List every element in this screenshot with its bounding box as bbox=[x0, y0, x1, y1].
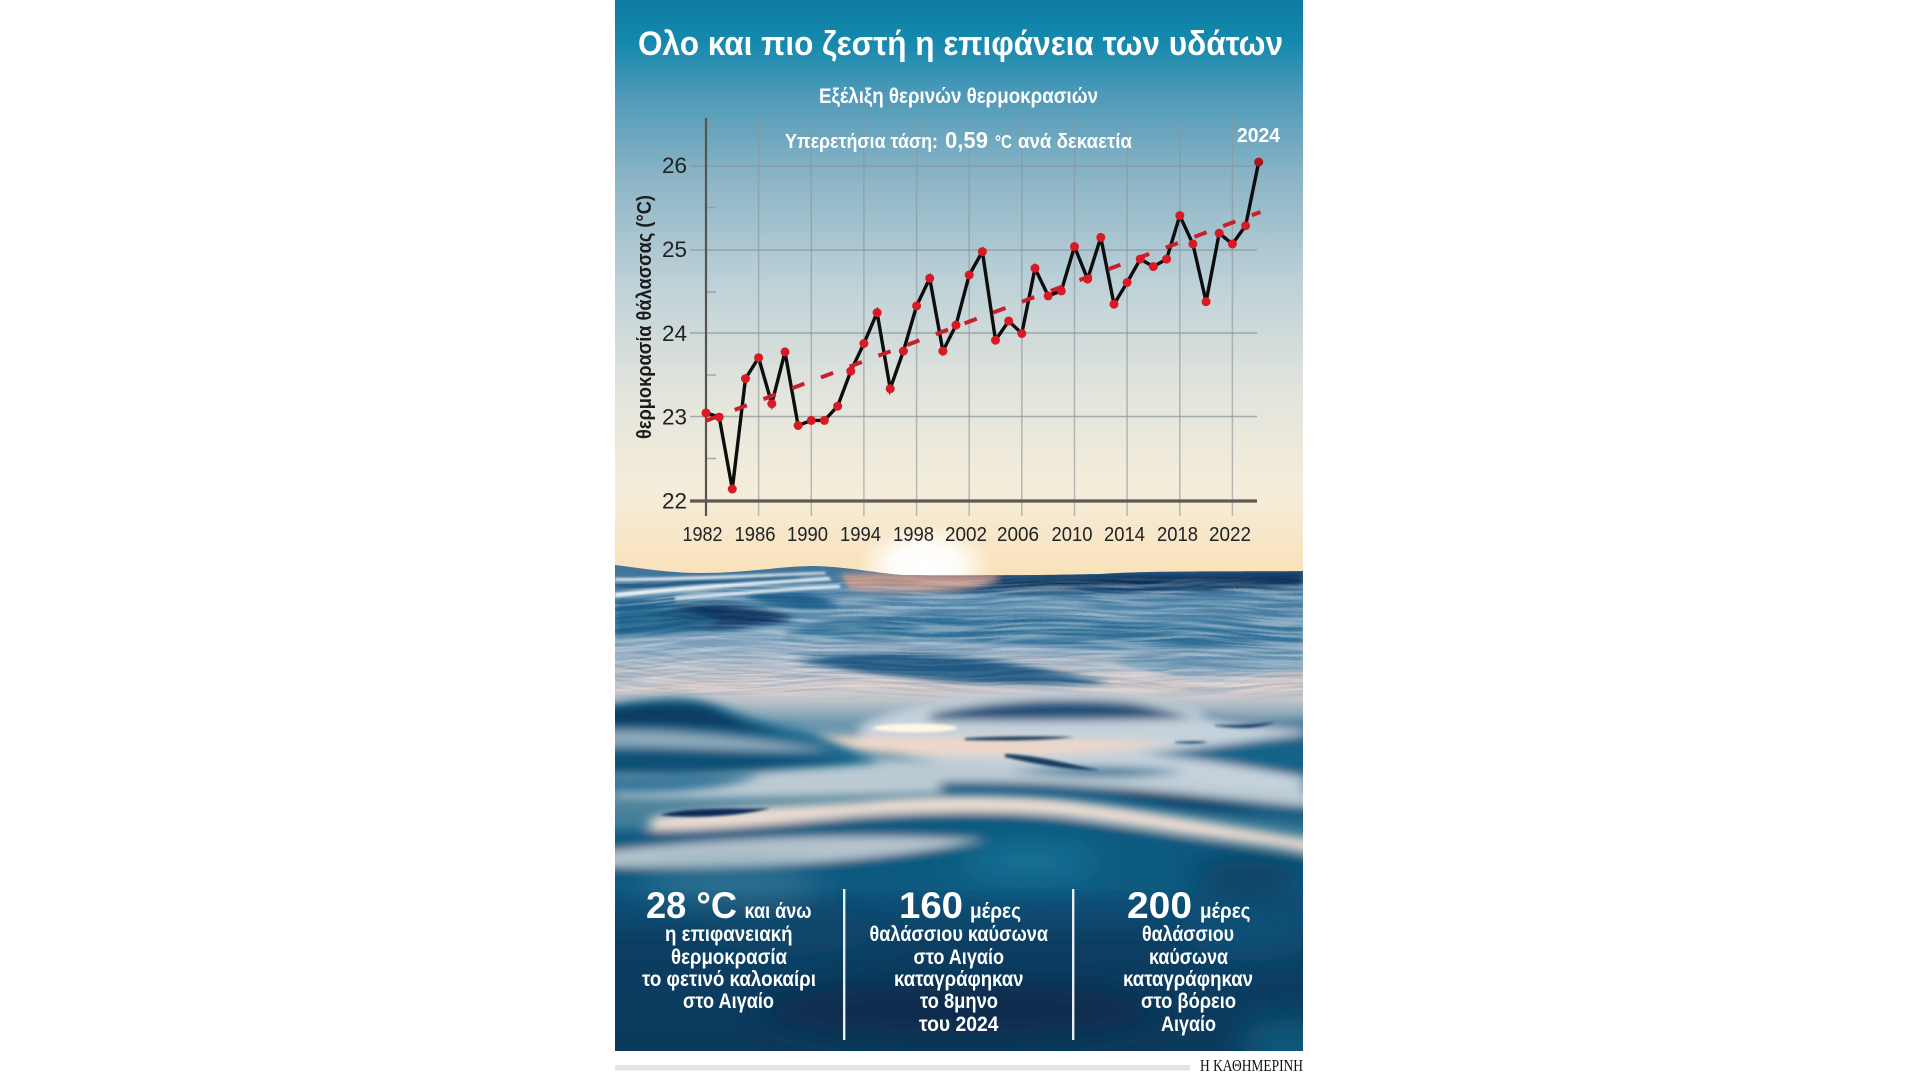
separator 2 bbox=[1072, 889, 1074, 1040]
x axis labels: 1998 bbox=[893, 524, 934, 546]
fact 2: 160 days: καταγράφηκαν bbox=[894, 968, 1024, 991]
temperature line bbox=[706, 162, 1259, 489]
x axis labels: 1982 bbox=[682, 524, 722, 546]
y axis labels: 25 bbox=[662, 237, 687, 262]
separator 1 bbox=[843, 889, 845, 1040]
fact 1: 28 °C: στο Αιγαίο bbox=[683, 990, 774, 1013]
x axis labels: 2006 bbox=[997, 524, 1039, 546]
panel: sea waves bbox=[615, 565, 1303, 1051]
fact 1: 28 °C: 28 °C bbox=[646, 885, 737, 926]
fact 3: 200 days: στο βόρειο bbox=[1141, 990, 1236, 1013]
fact 3: 200 days: 200 bbox=[1127, 885, 1192, 926]
y axis labels: 26 bbox=[662, 153, 687, 178]
fact 1: 28 °C: η επιφανειακή bbox=[665, 923, 792, 946]
x axis labels: 2022 bbox=[1209, 524, 1251, 546]
fact 3: 200 days: μέρες bbox=[1200, 900, 1251, 923]
trend annotation: Υπερετήσια τάση: bbox=[785, 130, 938, 153]
y axis title: θερμοκρασία θάλασσας (°C) bbox=[634, 195, 656, 439]
fact 3: 200 days: θαλάσσιου bbox=[1142, 923, 1234, 946]
fact 1: 28 °C: το φετινό καλοκαίρι bbox=[642, 968, 816, 991]
fact 1: 28 °C: και άνω bbox=[744, 900, 812, 923]
x axis labels bbox=[682, 524, 1251, 546]
y axis labels: 23 bbox=[662, 404, 687, 430]
fact 3: 200 days: καύσωνα bbox=[1149, 946, 1228, 969]
trend annotation: °C bbox=[995, 132, 1012, 152]
footer bar bbox=[615, 1065, 1190, 1070]
left dark wave hill bbox=[600, 697, 1320, 890]
y axis labels: 24 bbox=[662, 321, 687, 346]
x axis labels: 2002 bbox=[945, 524, 987, 546]
fact 1: 28 °C: θερμοκρασία bbox=[671, 946, 787, 969]
bottom dark water glows bbox=[640, 850, 1340, 1071]
fact 3: 200 days: καταγράφηκαν bbox=[1123, 968, 1253, 991]
fact 2: 160 days: στο Αιγαίο bbox=[914, 946, 1004, 969]
sun glow bbox=[862, 528, 988, 576]
line chart: sea temperature 1982-2024 bbox=[634, 118, 1281, 546]
fact 2: 160 days: μέρες bbox=[970, 900, 1021, 923]
x axis labels: 1994 bbox=[840, 524, 881, 546]
fact 2: 160 days bbox=[870, 885, 1048, 1036]
x axis labels: 2018 bbox=[1157, 524, 1198, 546]
ripple texture bbox=[615, 576, 1303, 698]
title: Ολο και πιο ζεστή η επιφάνεια των υδάτων bbox=[638, 25, 1283, 63]
trend annotation: ανά δεκαετία bbox=[1018, 130, 1132, 153]
white wave streaks bbox=[615, 572, 840, 600]
axes bbox=[705, 118, 707, 516]
label: 2024: 2024 bbox=[1237, 125, 1281, 147]
horizontal grid lines bbox=[690, 124, 1257, 458]
vertical grid lines bbox=[759, 118, 1232, 516]
fact 3: 200 days bbox=[1123, 885, 1253, 1036]
x axis labels: 1986 bbox=[734, 524, 776, 546]
fact 2: 160 days: 160 bbox=[899, 885, 963, 926]
x axis labels: 1990 bbox=[787, 524, 828, 546]
dark ripple patches over the texture bbox=[615, 592, 1110, 683]
subtitle: Εξέλιξη θερινών θερμοκρασιών bbox=[819, 85, 1098, 108]
fact 3: 200 days: Αιγαίο bbox=[1161, 1013, 1216, 1036]
lower smooth waves bbox=[615, 693, 1320, 826]
fact 2: 160 days: θαλάσσιου καύσωνα bbox=[870, 923, 1048, 946]
fact 2: 160 days: του 2024 bbox=[919, 1013, 999, 1036]
data points bbox=[702, 158, 1263, 494]
panel: sky background bbox=[615, 0, 1303, 608]
upper ripple zone bbox=[615, 570, 1303, 685]
infographic bbox=[615, 0, 1303, 1071]
trend line bbox=[706, 212, 1260, 421]
dark wave accents and highlights bbox=[660, 722, 1275, 817]
y axis labels bbox=[662, 153, 687, 514]
credit: newspaper name: Η ΚΑΘΗΜΕΡΙΝΗ bbox=[1200, 1056, 1303, 1075]
trend annotation bbox=[785, 127, 1132, 153]
y axis labels: 22 bbox=[662, 488, 687, 514]
x axis labels: 2014 bbox=[1104, 524, 1145, 546]
fact 1: 28 °C bbox=[642, 885, 816, 1013]
x axis labels: 2010 bbox=[1052, 524, 1092, 546]
trend annotation: 0,59 bbox=[945, 127, 988, 153]
fact 2: 160 days: το 8μηνο bbox=[920, 990, 998, 1013]
